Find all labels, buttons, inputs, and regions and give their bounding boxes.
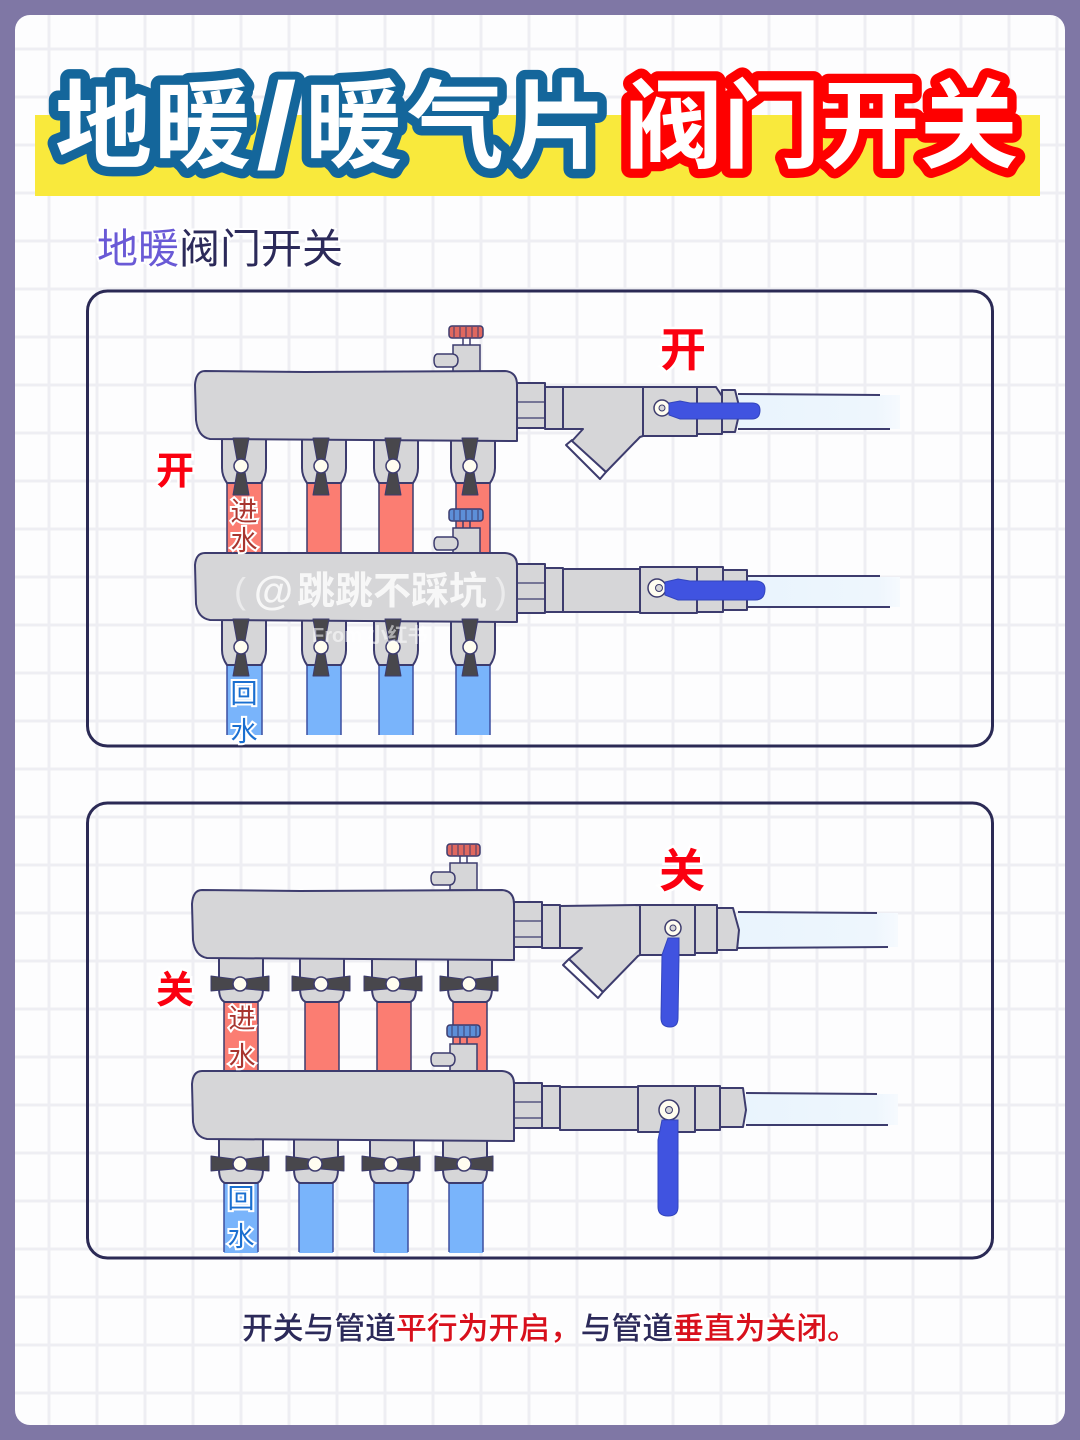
watermark: @ (254, 569, 293, 613)
return line with ball valve (514, 1083, 898, 1216)
label: inlet water: 进 (230, 497, 258, 527)
label: open, ball valve: 开 (660, 324, 706, 376)
hot water pipes (224, 1000, 487, 1073)
cold water pipes (227, 662, 490, 735)
upper manifold (192, 890, 514, 960)
label: inlet water 2: 水 (228, 1042, 256, 1072)
label: inlet water 2: 水 (230, 526, 258, 556)
watermark (234, 569, 507, 613)
valve handles lower, open (233, 619, 478, 676)
watermark: ) (495, 570, 507, 611)
panel: open state (88, 291, 992, 747)
label: return water: 回 (230, 679, 258, 709)
stubs upper (219, 958, 492, 1002)
vent valve: cold (431, 1025, 482, 1080)
panel: closed state (88, 803, 992, 1258)
label: closed, manifold: 关 (156, 970, 194, 1012)
subtitle: 地暖阀门开关 (97, 226, 343, 272)
label: inlet water: 进 (228, 1004, 256, 1034)
stubs lower (219, 1139, 487, 1183)
title: blue part: 地暖 (55, 72, 251, 181)
upper manifold (195, 371, 517, 441)
return line with ball valve (517, 564, 900, 613)
blue handle (669, 401, 760, 419)
title band (35, 115, 1040, 196)
hot water pipes (227, 480, 490, 555)
panel frame (88, 803, 992, 1258)
caption: 开关与管道平行为开启，与管道垂直为关闭。 (242, 1311, 858, 1346)
cold water pipes (224, 1180, 483, 1253)
blue handle (665, 579, 765, 600)
watermark: ( (234, 570, 246, 611)
lower manifold (195, 553, 517, 622)
supply line with strainer and ball valve (514, 902, 898, 1027)
vent valve: cold (434, 509, 485, 564)
label: closed, ball valve: 关 (659, 845, 705, 897)
panel frame (88, 291, 992, 746)
label: return water 2: 水 (230, 717, 258, 747)
label: open, manifold: 开 (156, 451, 194, 493)
valve handles lower, closed (211, 1156, 493, 1171)
watermark small: From 小红书 (312, 624, 428, 647)
label: return water: 回 (228, 1184, 254, 1214)
supply line with strainer and ball valve (517, 383, 900, 479)
valve handles upper, closed (211, 976, 498, 991)
blue handle (661, 938, 679, 1027)
label: return water 2: 水 (228, 1222, 254, 1252)
stubs upper (222, 438, 495, 483)
vent valve: hot (434, 326, 485, 381)
lower manifold (192, 1071, 514, 1141)
stubs lower (222, 620, 495, 665)
watermark: 跳跳不踩坑 (297, 571, 487, 613)
vent valve: hot (431, 844, 482, 899)
valve handles upper, open (233, 438, 478, 495)
title: blue part (55, 58, 607, 194)
title: blue part: 暖气片 (305, 72, 607, 181)
title: red part: 阀门开关 (624, 73, 1018, 181)
title: blue part: / (256, 58, 297, 194)
blue handle (658, 1120, 678, 1216)
